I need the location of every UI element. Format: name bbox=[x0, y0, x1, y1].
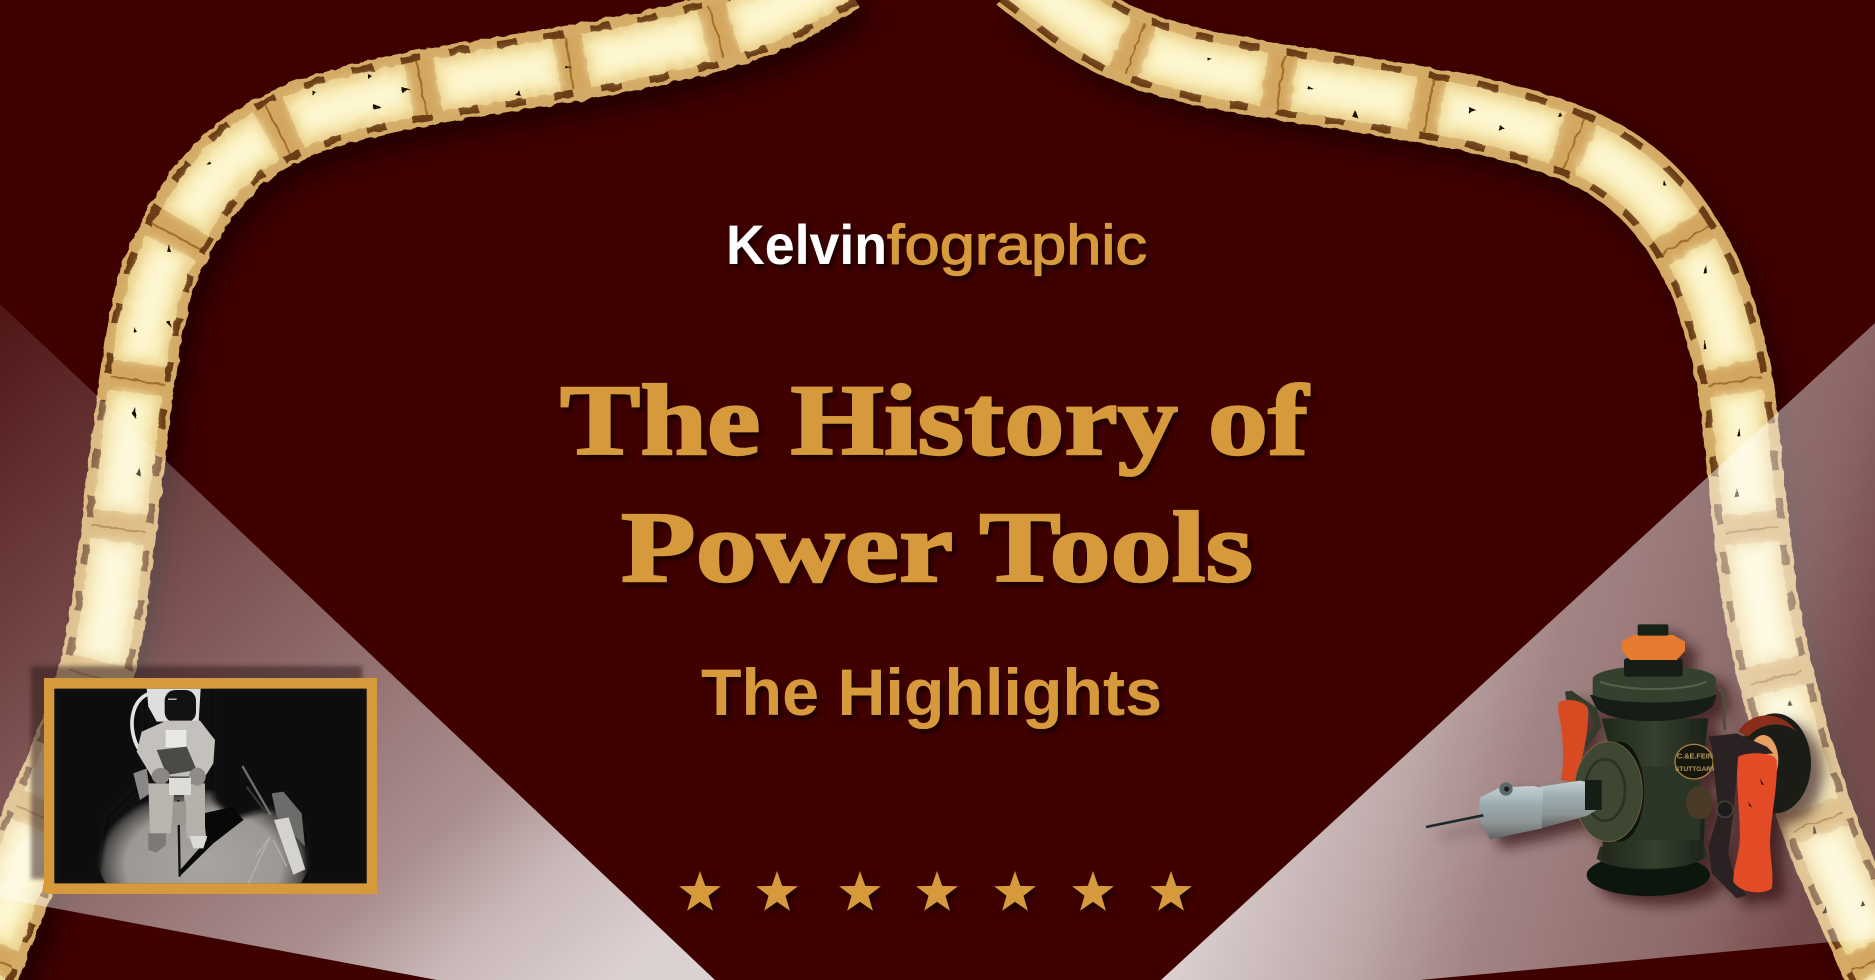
backpack and helmet bbox=[147, 689, 201, 722]
chuck bbox=[1478, 780, 1602, 839]
title line 2: Power Tools bbox=[621, 491, 1253, 603]
drill bit bbox=[1426, 815, 1483, 827]
photo background bbox=[54, 689, 367, 883]
lit lunar surface bbox=[98, 790, 308, 884]
light beam: right bbox=[1161, 323, 1875, 980]
moon scene bbox=[54, 688, 367, 884]
chest card bbox=[169, 778, 191, 795]
equipment rack bbox=[242, 766, 271, 815]
left handle bracket bbox=[1565, 691, 1602, 748]
logo part: fographic: fographic bbox=[887, 213, 1147, 276]
motor cap bbox=[1593, 666, 1716, 702]
motor foot bbox=[1587, 854, 1710, 896]
side bolt bbox=[1686, 786, 1713, 819]
orange nut bbox=[1622, 635, 1685, 660]
screw bbox=[1717, 801, 1733, 817]
boots bbox=[148, 833, 166, 853]
subtitle: The Highlights bbox=[701, 655, 1162, 729]
cord bbox=[1718, 688, 1725, 730]
title bbox=[560, 364, 1310, 603]
light beam: left bbox=[0, 304, 715, 980]
chuck head bbox=[1478, 786, 1543, 839]
top knob bbox=[1638, 624, 1668, 636]
rear wheel bbox=[1739, 713, 1811, 813]
logo part: Kelvin: Kelvin bbox=[726, 213, 887, 276]
logo: Kelvinfographic bbox=[726, 213, 1147, 276]
power drill: C.&E.FEIN bbox=[1677, 751, 1713, 760]
motor collar bbox=[1590, 695, 1717, 721]
suit torso bbox=[137, 721, 215, 777]
name badge bbox=[1675, 744, 1713, 779]
astronaut hose bbox=[132, 694, 148, 748]
motor body bbox=[1602, 718, 1708, 868]
right handle bracket bbox=[1708, 733, 1773, 898]
right handle bbox=[1733, 753, 1777, 892]
photo frame bbox=[44, 678, 377, 894]
legs bbox=[148, 783, 175, 833]
star row bbox=[679, 871, 1192, 911]
photo shadow bbox=[31, 666, 362, 879]
chuck barrel bbox=[1540, 781, 1597, 828]
side pulley bbox=[1596, 742, 1644, 842]
power drill: STUTTGART bbox=[1675, 766, 1715, 773]
photo: astronaut with power drill on the Moon bbox=[44, 678, 377, 894]
title line 1: The History of bbox=[560, 364, 1310, 476]
drill shaft bbox=[178, 800, 180, 877]
hands bbox=[152, 768, 170, 784]
power drill bbox=[1426, 624, 1811, 898]
astronaut shadow bbox=[179, 807, 243, 876]
neck bbox=[1624, 658, 1683, 677]
left handle bbox=[1558, 700, 1588, 782]
rock bbox=[133, 768, 150, 800]
